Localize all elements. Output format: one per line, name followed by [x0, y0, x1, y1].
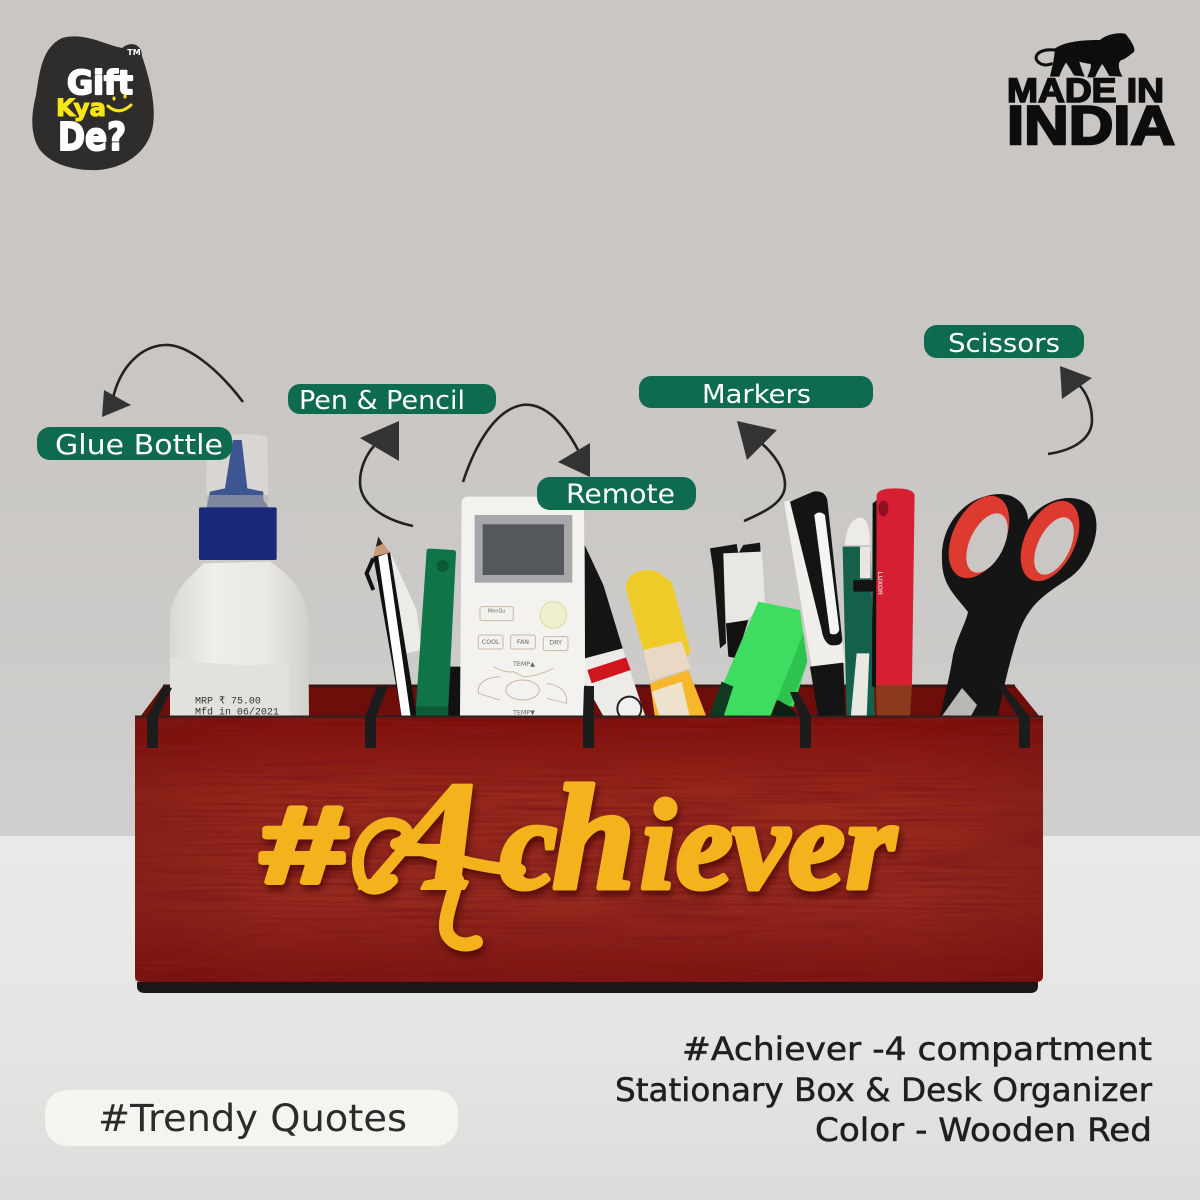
arrow: remote: [463, 405, 590, 482]
left handle ring: [936, 486, 1022, 588]
icon: lion: [1036, 33, 1134, 77]
label: Glue Bottle: Glue Bottle: [55, 428, 223, 461]
background table surface: [0, 836, 1200, 1200]
logo: Made in India: MADE IN: [1007, 72, 1164, 110]
yellow #Achiever lettering: r: [846, 774, 897, 916]
yellow highlighter: [626, 570, 691, 656]
label: Scissors: [924, 325, 1084, 359]
yellow #Achiever lettering: i: [640, 774, 676, 916]
item: markers and highlighters: [585, 543, 807, 721]
item: white pen: [784, 491, 846, 717]
item: glue bottle: [170, 434, 309, 718]
item: scissors: [936, 486, 1096, 716]
arrow: glue bottle: [102, 345, 243, 417]
product description: [615, 1030, 1153, 1149]
box base: [137, 982, 1038, 993]
yellow #Achiever lettering: [260, 751, 897, 944]
logo: Gift Kya De: TM: [127, 48, 141, 57]
yellow #Achiever lettering: v: [732, 774, 790, 916]
arrow: scissors: [1048, 366, 1092, 454]
right handle ring: [1009, 491, 1091, 591]
label: Remote: Remote: [566, 479, 675, 510]
capped white marker: [722, 548, 765, 623]
label: Pen & Pencil: Pen & Pencil: [299, 386, 465, 416]
pill: #Trendy Quotes: #Trendy Quotes: [98, 1097, 407, 1140]
yellow #Achiever lettering: h: [552, 755, 635, 921]
product description: Color - Wooden Red: [815, 1111, 1152, 1149]
item: remote: TEMP▼: [512, 710, 535, 717]
product description: #Achiever -4 compartment: [682, 1030, 1152, 1068]
item: remote: FAN: [517, 639, 529, 646]
item: remote: COOL: [482, 639, 500, 646]
item: remote: TEMP▲: [512, 661, 535, 668]
item: red pencil box: [872, 488, 915, 717]
box front panel: [135, 716, 1043, 982]
logo: Gift Kya De: [32, 36, 154, 170]
background wall: [0, 0, 1200, 836]
label: Remote: [537, 477, 696, 510]
yellow #Achiever lettering: e: [676, 774, 733, 916]
black marker with red band: [585, 545, 623, 658]
arrow: markers: [737, 421, 785, 521]
label: Markers: Markers: [702, 380, 811, 410]
logo: Made in India: INDIA: [1007, 94, 1175, 156]
product description: Stationary Box & Desk Organizer: [615, 1071, 1153, 1109]
item: cutter: [843, 517, 875, 718]
compartment dividers: [147, 686, 1030, 748]
item: remote: MenQu: [488, 609, 505, 615]
green highlighter: [723, 602, 807, 717]
label: Markers: [639, 376, 873, 410]
pill: #Trendy Quotes: [45, 1090, 458, 1146]
label: Scissors: Scissors: [948, 329, 1060, 359]
decorative swashes: [358, 823, 520, 889]
logo: Made in India: [1007, 33, 1175, 156]
yellow #Achiever lettering: e: [788, 774, 845, 916]
back of box interior: [140, 686, 1040, 717]
item: glue bottle: MRP ₹ 75.00: [195, 695, 261, 706]
arrow: pen and pencil: [360, 421, 413, 526]
item: remote: [460, 497, 586, 717]
item: remote: DRY: [549, 640, 562, 647]
yellow #Achiever lettering: A: [348, 751, 516, 922]
yellow #Achiever lettering: #: [260, 784, 348, 905]
item: red pencil box: LUXOR: [876, 572, 883, 595]
logo: Gift Kya De: Kya: [56, 94, 106, 122]
logo: Gift Kya De: De?: [58, 115, 126, 159]
logo: Gift Kya De: Gift: [67, 63, 133, 102]
remote screen: [475, 515, 572, 583]
item: glue bottle: Mfd in 06/2021: [195, 707, 279, 718]
item: pen and pencil: [367, 537, 462, 717]
yellow #Achiever lettering: c: [500, 774, 557, 916]
